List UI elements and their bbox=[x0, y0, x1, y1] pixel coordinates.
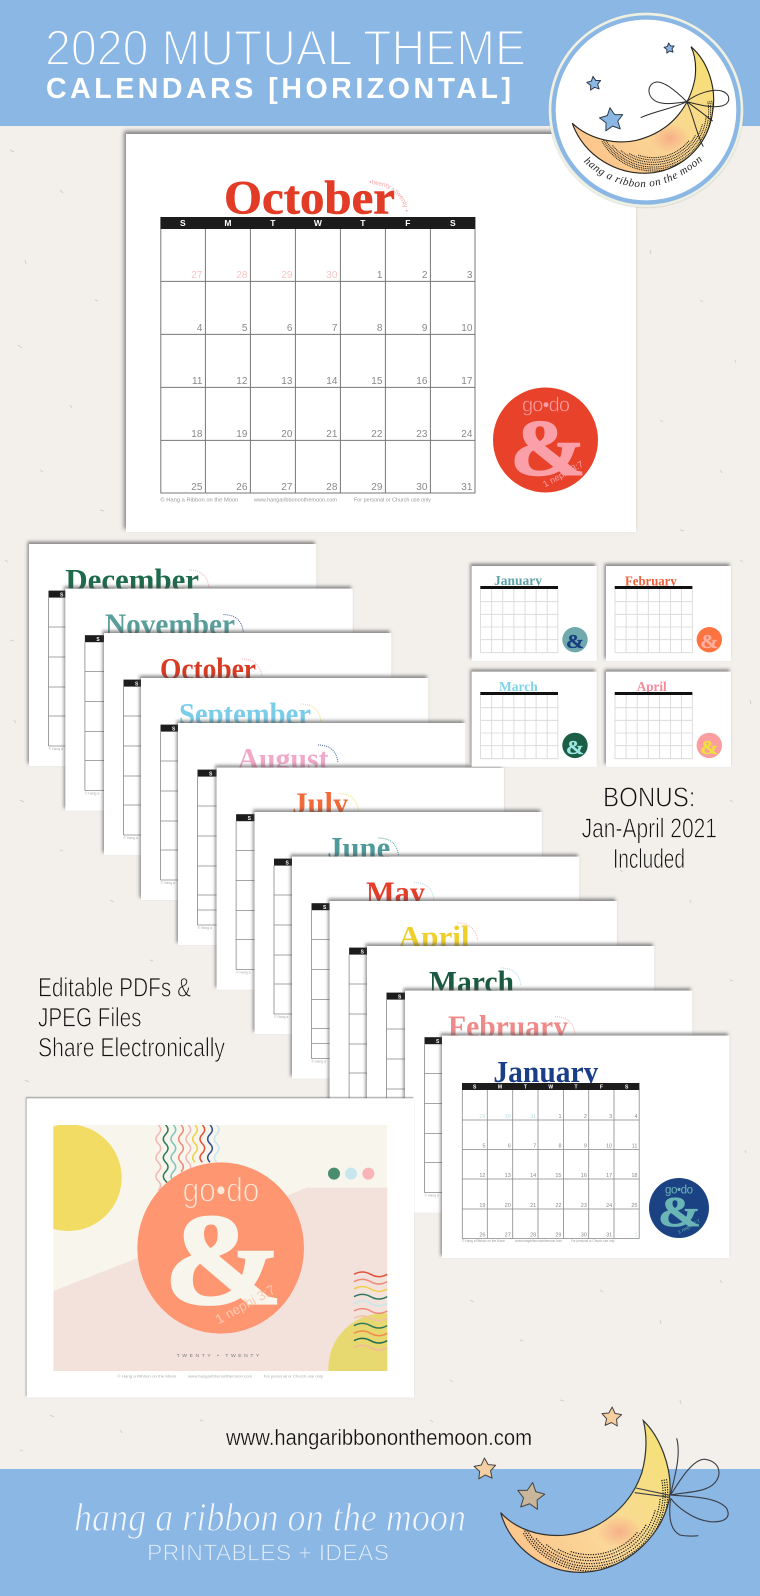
go do badge: October: go•do bbox=[522, 394, 570, 416]
small calendar: January 2021: January bbox=[494, 574, 542, 589]
small calendar: February 2021: February bbox=[625, 574, 677, 590]
January calendar grid: 27 bbox=[505, 1232, 511, 1238]
October calendar grid: 30 bbox=[416, 482, 428, 493]
January calendar grid: W bbox=[548, 1084, 553, 1090]
go do medallion: & bbox=[164, 1188, 283, 1332]
September sheet: September bbox=[179, 696, 311, 731]
October calendar grid: W bbox=[314, 218, 323, 228]
May sheet: May bbox=[366, 875, 425, 910]
January calendar grid: M bbox=[498, 1084, 502, 1090]
October calendar grid: 27 bbox=[281, 482, 293, 493]
dots bbox=[328, 1168, 340, 1180]
April sheet: © Hang a bbox=[349, 1104, 364, 1108]
icon: footer stars bbox=[474, 1406, 622, 1510]
go do medallion: 1 nephi 3:7 bbox=[213, 1282, 278, 1327]
small calendar: February 2021 bbox=[606, 566, 731, 661]
January calendar grid: 18 bbox=[631, 1173, 638, 1179]
July sheet: S bbox=[248, 816, 252, 822]
footer band bbox=[0, 1469, 760, 1596]
September sheet bbox=[141, 678, 428, 900]
editable files text: Editable PDFs & bbox=[38, 973, 191, 1003]
January calendar grid: 23 bbox=[581, 1203, 587, 1209]
small calendar: January 2021 bbox=[472, 566, 597, 661]
small calendar: January 2021: & bbox=[566, 631, 584, 653]
August sheet: August bbox=[238, 741, 329, 776]
October calendar grid: 14 bbox=[326, 376, 338, 387]
October sheet footer: © Hang a Ribbon on the Moon bbox=[160, 496, 238, 504]
icon: ribbon bow bbox=[641, 82, 729, 147]
October stack sheet bbox=[104, 633, 391, 855]
small calendar: April 2021 bbox=[606, 672, 731, 767]
January calendar grid: F bbox=[600, 1084, 603, 1090]
January calendar grid: 28 bbox=[530, 1232, 536, 1238]
go do badge: October: 1 nephi 3:7 bbox=[541, 459, 585, 489]
January calendar grid: 1 bbox=[558, 1114, 562, 1120]
January calendar grid: 11 bbox=[632, 1144, 638, 1150]
January calendar grid: 5 bbox=[482, 1144, 486, 1150]
February sheet bbox=[405, 991, 692, 1213]
January calendar grid: 22 bbox=[555, 1203, 562, 1209]
January calendar grid: S bbox=[473, 1084, 477, 1090]
go do medallion bbox=[137, 1162, 304, 1334]
November sheet: S bbox=[96, 637, 100, 643]
October calendar grid: 18 bbox=[191, 429, 203, 440]
October calendar grid: 16 bbox=[416, 376, 428, 387]
March sheet: S bbox=[398, 994, 402, 1000]
footer tagline: PRINTABLES + IDEAS bbox=[147, 1540, 389, 1566]
February sheet: February bbox=[448, 1009, 568, 1044]
October sheet footer bbox=[160, 496, 431, 504]
December sheet: S bbox=[60, 592, 64, 598]
January calendar grid: 30 bbox=[581, 1232, 587, 1238]
March sheet: © Hang a bbox=[386, 1149, 401, 1153]
July sheet: © Hang a bbox=[236, 971, 251, 975]
January calendar grid: 14 bbox=[530, 1173, 536, 1179]
October calendar grid: S bbox=[450, 218, 456, 228]
January calendar grid: 31 bbox=[606, 1232, 612, 1238]
October heading: October bbox=[224, 172, 395, 224]
small calendar: March 2021: & bbox=[566, 737, 584, 759]
poster footer bbox=[117, 1373, 323, 1378]
October calendar grid: 29 bbox=[281, 270, 293, 281]
poster footer: For personal or Church use only bbox=[264, 1373, 323, 1378]
January calendar grid: 10 bbox=[606, 1144, 612, 1150]
October stack sheet: S bbox=[135, 681, 139, 687]
January sheet footer: For personal or Church use only bbox=[571, 1239, 615, 1243]
June sheet: June bbox=[327, 830, 390, 865]
header band bbox=[0, 0, 760, 126]
October calendar grid: T bbox=[270, 218, 276, 228]
October stack sheet: © Hang a bbox=[124, 836, 138, 840]
July sheet bbox=[217, 768, 504, 990]
October calendar grid: 21 bbox=[326, 429, 338, 440]
January calendar grid: 2 bbox=[584, 1114, 587, 1120]
September sheet: © Hang a bbox=[160, 881, 175, 885]
November sheet: © Hang a bbox=[85, 792, 99, 796]
poster artwork bbox=[53, 1125, 388, 1371]
go do medallion: go•do bbox=[183, 1172, 259, 1210]
small calendar: April 2021: & bbox=[700, 737, 718, 759]
footer script brand: hang a ribbon on the moon bbox=[74, 1494, 466, 1540]
January calendar grid: 29 bbox=[479, 1114, 486, 1120]
small calendar: February 2021: & bbox=[700, 631, 718, 653]
October calendar grid: 28 bbox=[236, 270, 248, 281]
October sheet footer: www.hangaribbononthemoon.com bbox=[253, 498, 337, 504]
January calendar grid: 9 bbox=[584, 1144, 587, 1150]
January calendar grid: T bbox=[524, 1084, 527, 1090]
poster footer: © Hang a Ribbon on the Moon bbox=[117, 1373, 176, 1378]
January calendar grid: 8 bbox=[558, 1144, 562, 1150]
October calendar grid: S bbox=[180, 218, 186, 228]
January calendar grid: 30 bbox=[505, 1114, 511, 1120]
December sheet bbox=[29, 544, 316, 766]
January calendar grid: 20 bbox=[505, 1203, 511, 1209]
October calendar grid: 24 bbox=[461, 429, 473, 440]
April sheet: S bbox=[361, 949, 365, 955]
editable files text bbox=[38, 973, 225, 1062]
footer moon illustration bbox=[474, 1406, 728, 1572]
icon: footer crescent moon bbox=[501, 1421, 670, 1572]
July sheet: July bbox=[292, 786, 349, 821]
September sheet: S bbox=[172, 726, 176, 732]
October calendar grid: 4 bbox=[197, 323, 203, 334]
bonus text: Jan-April 2021 bbox=[582, 812, 717, 844]
January calendar grid: 3 bbox=[609, 1114, 612, 1120]
October calendar grid: 22 bbox=[371, 429, 383, 440]
March sheet: March bbox=[429, 964, 514, 999]
October calendar grid: 31 bbox=[461, 482, 473, 493]
editable files text: Share Electronically bbox=[38, 1032, 225, 1062]
October calendar grid: 20 bbox=[281, 429, 293, 440]
website url: www.hangaribbononthemoon.com bbox=[225, 1425, 532, 1450]
October calendar grid bbox=[160, 217, 475, 493]
November sheet bbox=[65, 589, 353, 811]
January heading: January bbox=[493, 1054, 599, 1089]
January calendar grid: 17 bbox=[606, 1173, 612, 1179]
February sheet: © Hang a bbox=[424, 1194, 439, 1198]
poster footer: www.hangaribbononthemoon.com bbox=[188, 1373, 253, 1378]
October calendar grid: 12 bbox=[236, 376, 248, 387]
January calendar grid: 29 bbox=[555, 1232, 562, 1238]
go do badge: January: go•do bbox=[665, 1184, 693, 1196]
October calendar grid: 28 bbox=[326, 482, 338, 493]
January calendar grid: 24 bbox=[606, 1203, 612, 1209]
August sheet bbox=[178, 723, 465, 945]
January calendar grid: 31 bbox=[530, 1114, 536, 1120]
icon: stars bbox=[586, 42, 675, 132]
vertical wavy lines bbox=[156, 1125, 219, 1190]
November sheet: November bbox=[105, 607, 235, 642]
January calendar grid: 19 bbox=[479, 1203, 486, 1209]
October calendar grid: 15 bbox=[371, 376, 383, 387]
January calendar grid: 12 bbox=[479, 1173, 486, 1179]
October calendar grid: 9 bbox=[422, 323, 428, 334]
twenty twenty arc: •twenty • twenty • bbox=[370, 180, 408, 212]
October calendar grid: 8 bbox=[377, 323, 383, 334]
October stack sheet: October bbox=[160, 651, 256, 686]
October calendar grid: 26 bbox=[236, 482, 248, 493]
January calendar grid: 21 bbox=[530, 1203, 536, 1209]
January calendar grid: 4 bbox=[634, 1114, 638, 1120]
April sheet bbox=[330, 901, 617, 1123]
October calendar grid: 5 bbox=[242, 323, 248, 334]
October calendar grid: 30 bbox=[326, 270, 338, 281]
go do badge: January bbox=[649, 1178, 709, 1238]
October calendar grid: 1 bbox=[377, 270, 383, 281]
January calendar grid: 7 bbox=[533, 1144, 536, 1150]
April sheet: April bbox=[399, 919, 470, 954]
October calendar grid: 13 bbox=[281, 376, 293, 387]
October calendar grid: 3 bbox=[467, 270, 473, 281]
January sheet footer bbox=[462, 1239, 615, 1243]
January sheet bbox=[442, 1036, 729, 1258]
October calendar grid: T bbox=[360, 218, 366, 228]
October calendar grid: 27 bbox=[191, 270, 203, 281]
August sheet: S bbox=[209, 771, 213, 777]
August sheet: © Hang a bbox=[198, 926, 212, 930]
small calendar: March 2021: March bbox=[499, 680, 538, 695]
May sheet: © Hang a bbox=[312, 1060, 326, 1064]
October calendar grid: 6 bbox=[287, 323, 293, 334]
subtitle: CALENDARS [HORIZONTAL] bbox=[46, 73, 514, 105]
June sheet: © Hang a bbox=[274, 1015, 288, 1019]
January calendar grid: 26 bbox=[479, 1232, 486, 1238]
February sheet: S bbox=[436, 1039, 440, 1045]
poster artwork: TWENTY • TWENTY bbox=[177, 1353, 260, 1359]
January calendar grid: 13 bbox=[505, 1173, 511, 1179]
go do badge: January: & bbox=[658, 1190, 701, 1236]
horizontal wavy lines bbox=[354, 1272, 387, 1350]
October calendar grid: 2 bbox=[422, 270, 428, 281]
January sheet footer: © Hang a Ribbon on the Moon bbox=[462, 1239, 505, 1243]
small calendar: April 2021: April bbox=[637, 680, 667, 695]
October sheet footer: For personal or Church use only bbox=[354, 498, 431, 504]
October calendar grid: F bbox=[405, 218, 411, 228]
October calendar grid: 23 bbox=[416, 429, 428, 440]
October calendar grid: 7 bbox=[332, 323, 338, 334]
January sheet footer: www.hangaribbononthemoon.com bbox=[515, 1239, 562, 1243]
October calendar grid: 25 bbox=[191, 482, 203, 493]
October calendar grid: 11 bbox=[192, 376, 203, 387]
June sheet: S bbox=[286, 860, 290, 866]
October calendar grid: M bbox=[224, 218, 231, 228]
October calendar grid: 29 bbox=[371, 482, 383, 493]
go do badge: October: & bbox=[510, 406, 586, 492]
January calendar grid: 25 bbox=[631, 1203, 638, 1209]
January calendar grid: 15 bbox=[555, 1173, 562, 1179]
small calendar: March 2021 bbox=[472, 672, 597, 767]
panel: large October calendar sheet bbox=[121, 128, 637, 532]
October calendar grid: 10 bbox=[461, 323, 473, 334]
January calendar grid bbox=[462, 1083, 639, 1238]
October calendar grid: 19 bbox=[236, 429, 248, 440]
bonus text: BONUS: bbox=[603, 782, 696, 813]
icon: crescent moon bbox=[572, 47, 714, 173]
December sheet: © Hang a bbox=[48, 747, 63, 751]
January calendar grid: 16 bbox=[581, 1173, 587, 1179]
December sheet: December bbox=[65, 562, 199, 597]
March sheet bbox=[367, 946, 654, 1168]
January calendar grid: 6 bbox=[508, 1144, 511, 1150]
May sheet: S bbox=[323, 905, 327, 911]
logo badge bbox=[548, 12, 744, 208]
October calendar grid: 17 bbox=[461, 376, 473, 387]
badge script text: hang a ribbon on the moon bbox=[584, 156, 702, 188]
panel: cover poster sheet bbox=[25, 1096, 414, 1398]
January calendar grid: 1 bbox=[634, 1232, 638, 1238]
editable files text: JPEG Files bbox=[38, 1002, 142, 1032]
January calendar grid: S bbox=[625, 1084, 629, 1090]
icon: footer ribbon bow bbox=[635, 1438, 728, 1536]
title: 2020 MUTUAL THEME bbox=[45, 20, 526, 76]
bonus text bbox=[582, 782, 717, 874]
May sheet bbox=[292, 857, 579, 1079]
go do badge: October bbox=[493, 388, 598, 492]
January calendar grid: T bbox=[574, 1084, 578, 1090]
go do badge: January: 1 nephi 3:7 bbox=[677, 1218, 702, 1236]
bonus text: Included bbox=[613, 843, 685, 874]
June sheet bbox=[254, 812, 542, 1034]
